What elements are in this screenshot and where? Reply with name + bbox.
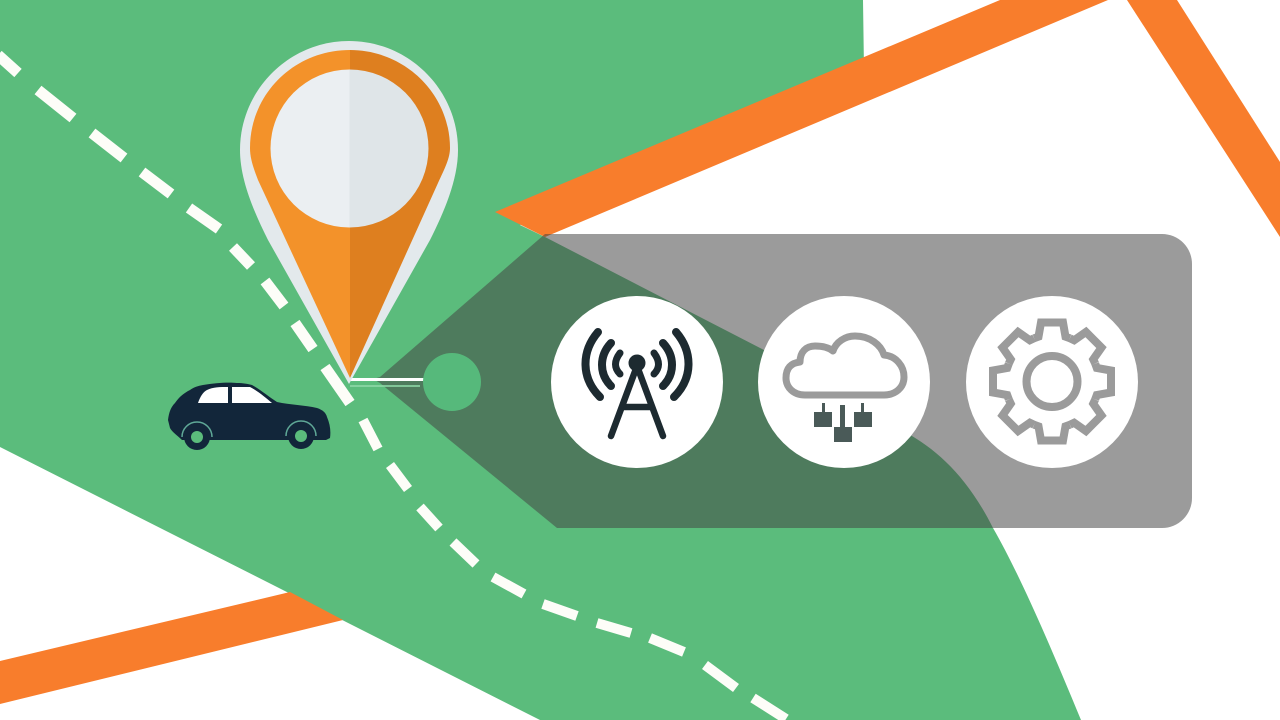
icon circle: gear (966, 296, 1138, 468)
icon circle: antenna (551, 296, 723, 468)
connector line (348, 378, 426, 387)
dashed white route (0, 55, 786, 719)
connector green dot (423, 353, 481, 411)
icon: car (168, 383, 330, 450)
location pin (240, 41, 458, 384)
grey callout panel (373, 234, 1192, 528)
orange road bottom left (0, 592, 343, 704)
orange road top right (1127, 0, 1280, 237)
icon circle: cloud (758, 296, 930, 468)
orange road top centre (495, 0, 1108, 237)
